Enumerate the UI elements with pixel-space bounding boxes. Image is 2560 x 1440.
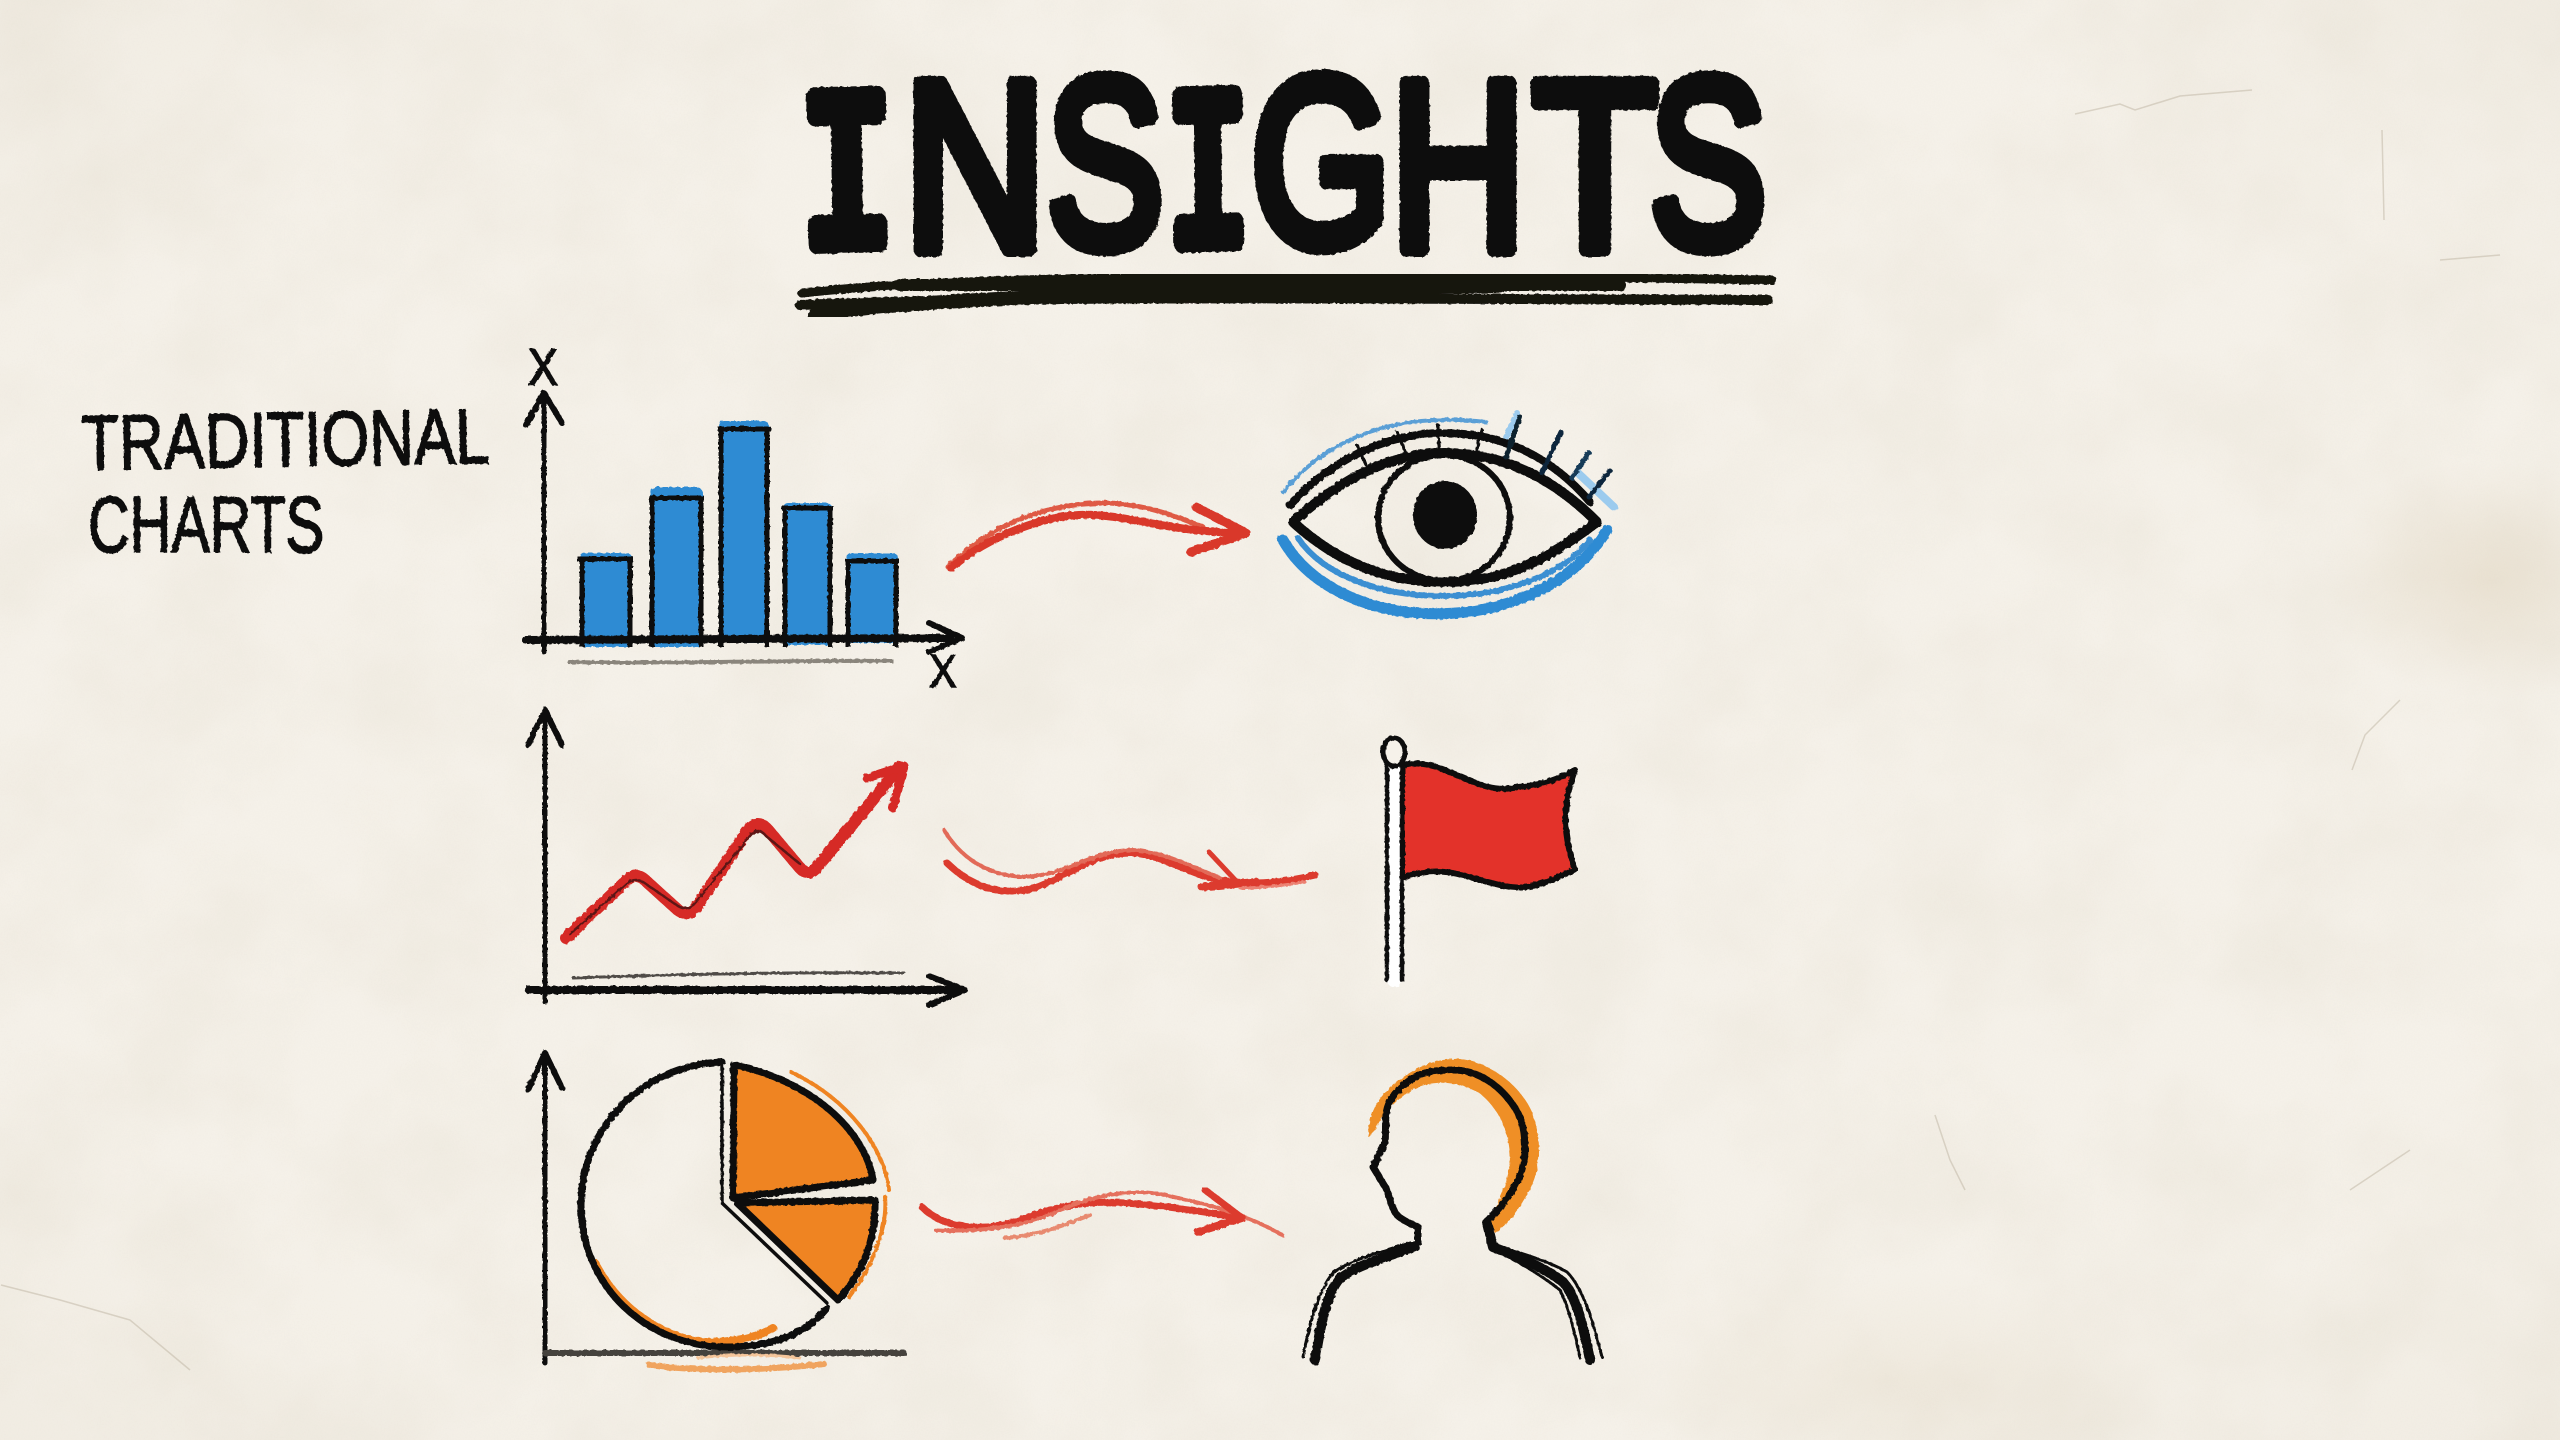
orange slice 1: [733, 1065, 873, 1198]
flag cloth: [1402, 763, 1575, 888]
axis label: top x: X: [528, 339, 558, 397]
ground shadow: [568, 661, 893, 663]
title: I: [798, 60, 896, 310]
white slice: [581, 1062, 827, 1347]
line chart: [528, 710, 965, 1005]
title: S: [1047, 29, 1163, 297]
outline: [1290, 433, 1597, 582]
icon: person silhouette: [1303, 1059, 1602, 1360]
pupil: [1413, 481, 1477, 549]
icon: eye: [1283, 413, 1614, 614]
axes: [528, 1053, 904, 1363]
orange slice 2: [737, 1200, 875, 1300]
title: N: [904, 31, 1046, 300]
pole knob: [1383, 738, 1405, 766]
title underline: [800, 276, 1772, 315]
orange under-strokes: [595, 1072, 889, 1369]
lashes: [1357, 417, 1610, 497]
pie chart: [528, 1053, 904, 1369]
arrow: bars to eye: [948, 503, 1246, 568]
axis label: bottom x: X: [930, 645, 956, 697]
axes: [526, 393, 962, 652]
title: S: [1650, 29, 1766, 297]
icon: red flag: [1383, 738, 1575, 980]
bar chart: [526, 339, 962, 697]
axes: [528, 710, 965, 1005]
title: G: [1251, 28, 1391, 296]
arrow: pie to person: [922, 1190, 1282, 1238]
flag pole: [1387, 762, 1401, 980]
title: [798, 28, 1766, 310]
title: I: [1165, 59, 1252, 309]
bars: [577, 421, 899, 647]
label: traditional charts: TRADITIONAL: [81, 392, 490, 487]
red trend line: [566, 766, 904, 938]
left shoulder: [1303, 1243, 1415, 1360]
right shoulder: [1487, 1223, 1602, 1360]
head outline: [1373, 1070, 1525, 1243]
label: traditional charts: [81, 392, 490, 569]
title: T: [1533, 32, 1657, 301]
title: H: [1390, 32, 1526, 300]
orange halo: [1368, 1059, 1539, 1233]
blue strokes: [1283, 413, 1614, 614]
label: traditional charts: CHARTS: [88, 480, 324, 569]
arrow: line to flag: [944, 830, 1315, 891]
